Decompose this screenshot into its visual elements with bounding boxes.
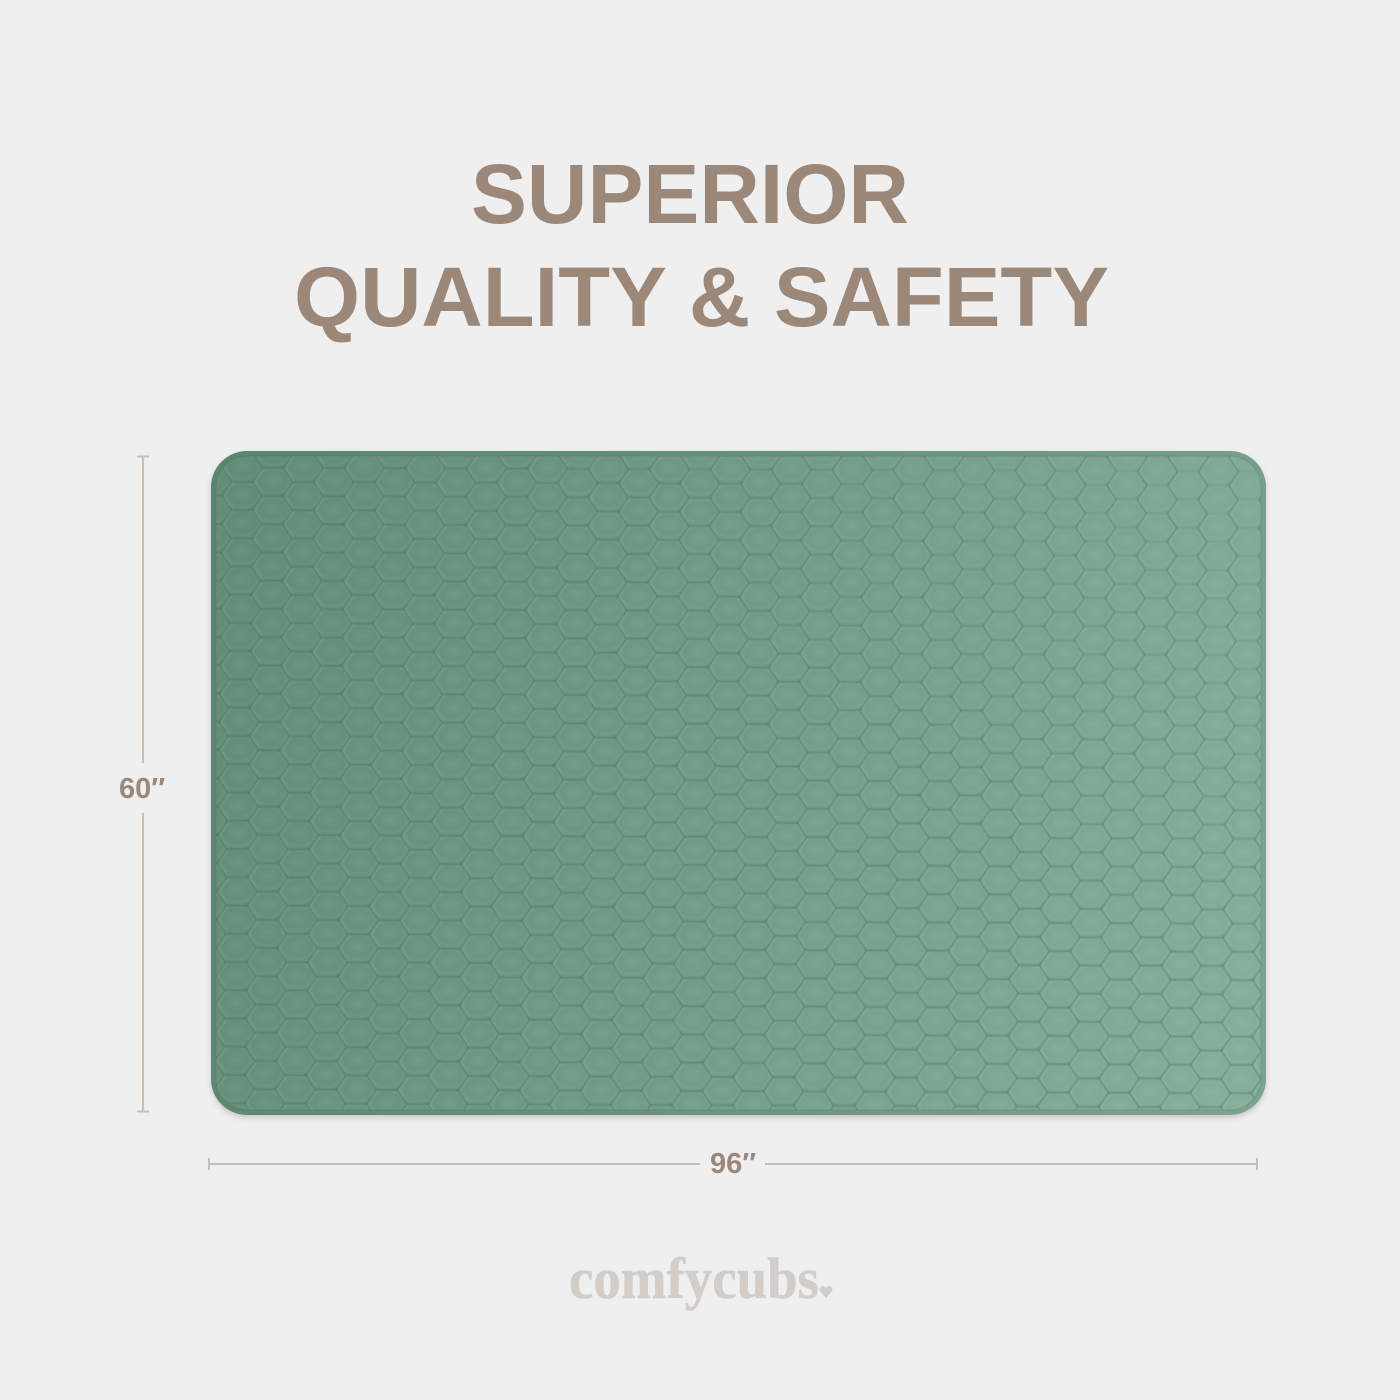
title line 2: QUALITY & SAFETY [294, 250, 1109, 344]
title [294, 147, 1109, 344]
brand logo [569, 1246, 832, 1311]
width ruler [209, 1158, 1257, 1170]
height dimension: 60 inches [119, 456, 165, 1112]
logo heart [820, 1286, 832, 1298]
logo wordmark: comfycubs [569, 1246, 819, 1311]
title line 1: SUPERIOR [471, 147, 909, 241]
width dimension: 96 inches [209, 1148, 1257, 1180]
mat hem [211, 451, 1266, 1115]
mat body [216, 456, 1261, 1110]
height ruler [137, 456, 149, 1112]
height label: 60″ [119, 773, 165, 805]
quilted green play mat [211, 451, 1266, 1115]
hexagon quilting [211, 451, 1266, 1115]
hem stitching [216, 456, 1261, 1110]
width label: 96″ [710, 1148, 756, 1180]
